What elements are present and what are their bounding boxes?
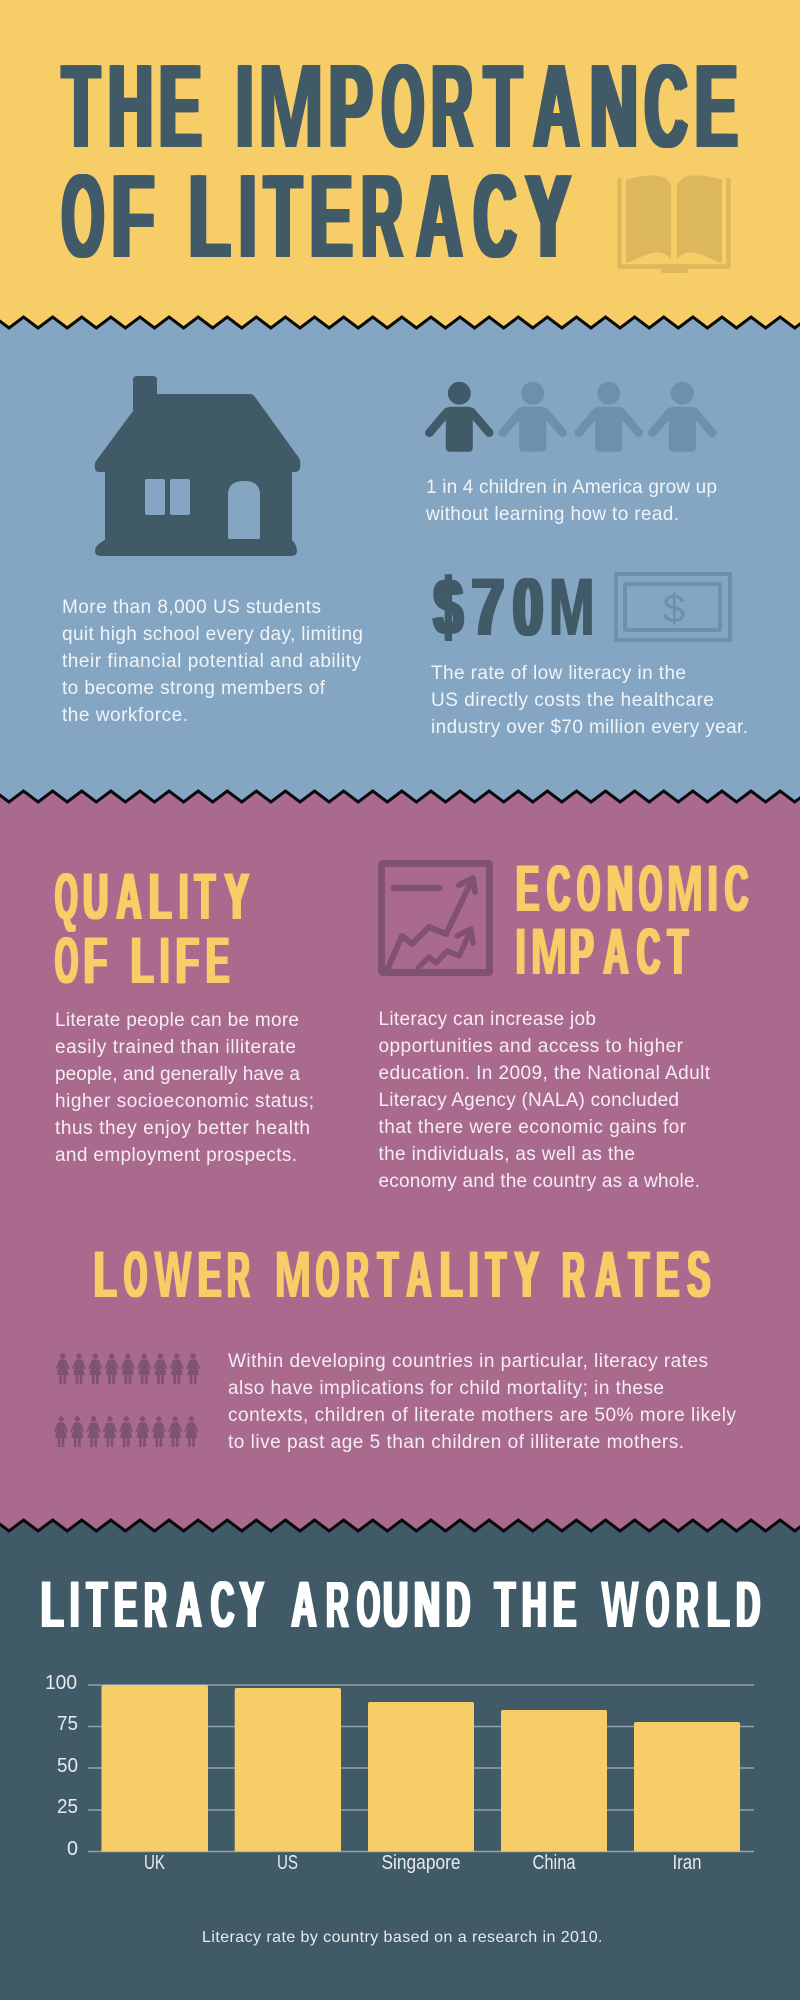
text: dropout statistic — [62, 597, 363, 726]
heading: economic impact: A — [604, 915, 628, 988]
text: quality of life body: easily trained than illiterate — [55, 1037, 296, 1058]
heading: literacy around the world: E — [553, 1568, 576, 1641]
heading: quality of life: O — [55, 924, 78, 997]
text: economic impact body: Literacy Agency (NALA) concluded — [378, 1090, 679, 1111]
icon: open book — [620, 175, 728, 273]
panel: world literacy background — [0, 1520, 800, 2000]
text: healthcare cost: The rate of low literacy in the — [431, 663, 686, 684]
heading: quality of life: L — [131, 924, 153, 997]
heading: lower mortality rates: R — [562, 1238, 585, 1311]
heading: lower mortality rates: E — [656, 1238, 679, 1311]
axis labels: Singapore — [382, 1852, 460, 1874]
bar: UK — [102, 1685, 208, 1852]
axis labels: 25 — [57, 1796, 78, 1818]
heading: literacy around the world: T — [495, 1568, 515, 1641]
title: C — [474, 150, 516, 283]
heading: literacy around the world: D — [446, 1568, 470, 1641]
heading: economic impact: I — [708, 852, 717, 925]
heading: literacy around the world: N — [414, 1568, 440, 1641]
heading: literacy around the world: L — [707, 1568, 729, 1641]
axis labels: 50 — [57, 1755, 78, 1777]
title: T — [62, 40, 100, 173]
text: quality of life body — [55, 1010, 314, 1166]
heading: quality of life: I — [179, 860, 188, 933]
heading: lower mortality rates: T — [486, 1238, 506, 1311]
axis labels: US — [277, 1852, 298, 1874]
text: economic impact body: that there were economic gains for — [378, 1117, 687, 1138]
title: O — [62, 150, 104, 283]
heading: economic impact: P — [570, 915, 594, 988]
panel: statistics background — [0, 317, 800, 810]
text: healthcare cost — [431, 663, 748, 738]
icon: dollar bill — [616, 574, 730, 640]
heading: literacy around the world: R — [326, 1568, 349, 1641]
heading: lower mortality rates: W — [154, 1238, 192, 1311]
heading: economic impact: E — [516, 852, 539, 925]
title: R — [431, 40, 472, 173]
heading: lower mortality rates: M — [274, 1238, 311, 1311]
text: dropout statistic: quit high school every day, limiting — [62, 624, 363, 645]
heading: literacy around the world: E — [114, 1568, 137, 1641]
heading: lower mortality rates — [94, 1238, 710, 1311]
heading: lower mortality rates: O — [316, 1238, 339, 1311]
heading: economic impact: C — [547, 852, 570, 925]
axis labels: 100 — [45, 1672, 77, 1694]
heading: lower mortality rates: S — [687, 1238, 710, 1311]
big number: $70M: $ — [434, 562, 463, 653]
text: child mortality body: to live past age 5 than children of illiterate mothers. — [228, 1432, 684, 1453]
text: economic impact body: education. In 2009, the National Adult — [378, 1063, 711, 1084]
title: Y — [526, 150, 570, 283]
heading: economic impact: I — [516, 915, 525, 988]
heading: literacy around the world: O — [646, 1568, 669, 1641]
heading: quality of life: U — [83, 860, 108, 933]
text: economic impact body: Literacy can increase job — [378, 1009, 596, 1030]
heading: economic impact: M — [530, 915, 567, 988]
text: child mortality body: also have implications for child mortality; in these — [228, 1378, 664, 1399]
text: economic impact body: opportunities and access to higher — [378, 1036, 684, 1057]
text: dropout statistic: their financial potential and ability — [62, 651, 362, 672]
bar: Singapore — [368, 1702, 474, 1852]
title: O — [382, 40, 424, 173]
text: economic impact body: economy and the country as a whole. — [378, 1171, 700, 1192]
heading: lower mortality rates: R — [346, 1238, 369, 1311]
heading: quality of life: L — [149, 860, 171, 933]
bar: US — [235, 1688, 341, 1852]
text: chart footnote: Literacy rate by country based on a research in 2010. — [202, 1929, 602, 1946]
heading: lower mortality rates: A — [407, 1238, 431, 1311]
title — [60, 40, 738, 283]
axis labels: 0 — [67, 1838, 78, 1860]
icon: four people, one highlighted — [429, 382, 712, 452]
title: N — [590, 40, 638, 173]
heading: quality of life: E — [206, 924, 229, 997]
heading: economic impact — [516, 852, 749, 988]
title: F — [112, 150, 154, 283]
panel: benefits background — [0, 791, 800, 1540]
text: economic impact body — [378, 1009, 711, 1192]
title: E — [695, 40, 737, 173]
icon: two rows of women — [54, 1353, 200, 1447]
heading: literacy around the world: T — [87, 1568, 107, 1641]
heading: lower mortality rates: L — [94, 1238, 116, 1311]
heading: quality of life: A — [117, 860, 141, 933]
heading: economic impact: C — [725, 852, 748, 925]
title: A — [417, 150, 462, 283]
heading: literacy around the world: A — [177, 1568, 201, 1641]
heading: literacy around the world: D — [736, 1568, 760, 1641]
heading: lower mortality rates: T — [629, 1238, 649, 1311]
heading: lower mortality rates: I — [469, 1238, 478, 1311]
bar chart: literacy rate by country — [45, 1672, 754, 1874]
axis labels: UK — [144, 1852, 165, 1874]
title: T — [264, 150, 302, 283]
text: children statistic — [425, 477, 717, 525]
text: healthcare cost: industry over $70 million every year. — [431, 717, 748, 738]
text: quality of life body: Literate people can be more — [55, 1010, 299, 1031]
big number: $70M: 7 — [472, 562, 504, 653]
title: R — [361, 150, 402, 283]
icon: dollar bill: $ — [663, 587, 685, 631]
text: healthcare cost: US directly costs the healthcare — [431, 690, 714, 711]
title: I — [236, 40, 253, 173]
axis labels: Iran — [672, 1852, 702, 1874]
heading: literacy around the world: I — [70, 1568, 79, 1641]
text: dropout statistic: the workforce. — [62, 705, 188, 726]
text: child mortality body — [228, 1351, 736, 1453]
title: T — [484, 40, 522, 173]
heading: lower mortality rates: O — [124, 1238, 147, 1311]
title: E — [159, 40, 201, 173]
text: child mortality body: contexts, children of literate mothers are 50% more likely — [228, 1405, 736, 1426]
heading: literacy around the world: Y — [240, 1568, 264, 1641]
text: quality of life body: people, and generally have a — [55, 1064, 300, 1085]
heading: economic impact: M — [666, 852, 703, 925]
heading: lower mortality rates: T — [378, 1238, 398, 1311]
big number: $70M: M — [549, 562, 595, 653]
title: L — [189, 150, 230, 283]
heading: literacy around the world: L — [41, 1568, 63, 1641]
text: dropout statistic: More than 8,000 US students — [62, 597, 321, 618]
heading: literacy around the world: H — [522, 1568, 546, 1641]
heading: economic impact: C — [637, 915, 660, 988]
axis labels — [45, 1672, 702, 1874]
heading: economic impact: N — [607, 852, 633, 925]
heading: quality of life: I — [160, 924, 169, 997]
big number: $70M: 0 — [513, 562, 543, 653]
title: C — [645, 40, 687, 173]
heading: literacy around the world: O — [357, 1568, 380, 1641]
heading: quality of life: Q — [55, 860, 78, 933]
big number: $70M — [432, 562, 595, 653]
heading: quality of life: Y — [225, 860, 249, 933]
heading: economic impact: T — [668, 915, 688, 988]
title: H — [108, 40, 153, 173]
heading: literacy around the world — [41, 1568, 760, 1641]
heading: literacy around the world: A — [292, 1568, 316, 1641]
icon: chart with rising arrows — [382, 864, 490, 972]
heading: lower mortality rates: L — [440, 1238, 462, 1311]
text: quality of life body: and employment prospects. — [55, 1145, 297, 1166]
heading: quality of life: T — [195, 860, 215, 933]
axis labels: China — [532, 1852, 576, 1874]
heading: economic impact: O — [577, 852, 600, 925]
text: children statistic: without learning how to read. — [425, 504, 679, 525]
panel: title background — [0, 0, 800, 340]
heading: literacy around the world: R — [144, 1568, 167, 1641]
text: dropout statistic: to become strong members of — [62, 678, 326, 699]
icon: house — [95, 376, 300, 556]
heading: economic impact: O — [639, 852, 662, 925]
axis labels: 75 — [57, 1713, 78, 1735]
heading: lower mortality rates: E — [198, 1238, 221, 1311]
text: quality of life body: higher socioeconomic status; — [55, 1091, 314, 1112]
heading: quality of life: F — [84, 924, 107, 997]
heading: literacy around the world: C — [211, 1568, 234, 1641]
title: E — [310, 150, 352, 283]
bar: Iran — [634, 1722, 740, 1852]
title: P — [329, 40, 372, 173]
heading: lower mortality rates: Y — [515, 1238, 539, 1311]
text: quality of life body: thus they enjoy better health — [55, 1118, 310, 1139]
text: children statistic: 1 in 4 children in America grow up — [426, 477, 717, 498]
heading: lower mortality rates: R — [227, 1238, 250, 1311]
text: economic impact body: the individuals, as well as the — [378, 1144, 635, 1165]
text: child mortality body: Within developing countries in particular, literacy rates — [228, 1351, 708, 1372]
heading: quality of life: F — [176, 924, 199, 997]
title: I — [239, 150, 256, 283]
heading: literacy around the world: W — [601, 1568, 639, 1641]
title: A — [534, 40, 579, 173]
heading: quality of life — [54, 860, 250, 997]
bar: China — [501, 1710, 607, 1852]
heading: literacy around the world: R — [676, 1568, 699, 1641]
heading: lower mortality rates: A — [596, 1238, 620, 1311]
title: M — [257, 40, 324, 173]
heading: literacy around the world: U — [383, 1568, 408, 1641]
